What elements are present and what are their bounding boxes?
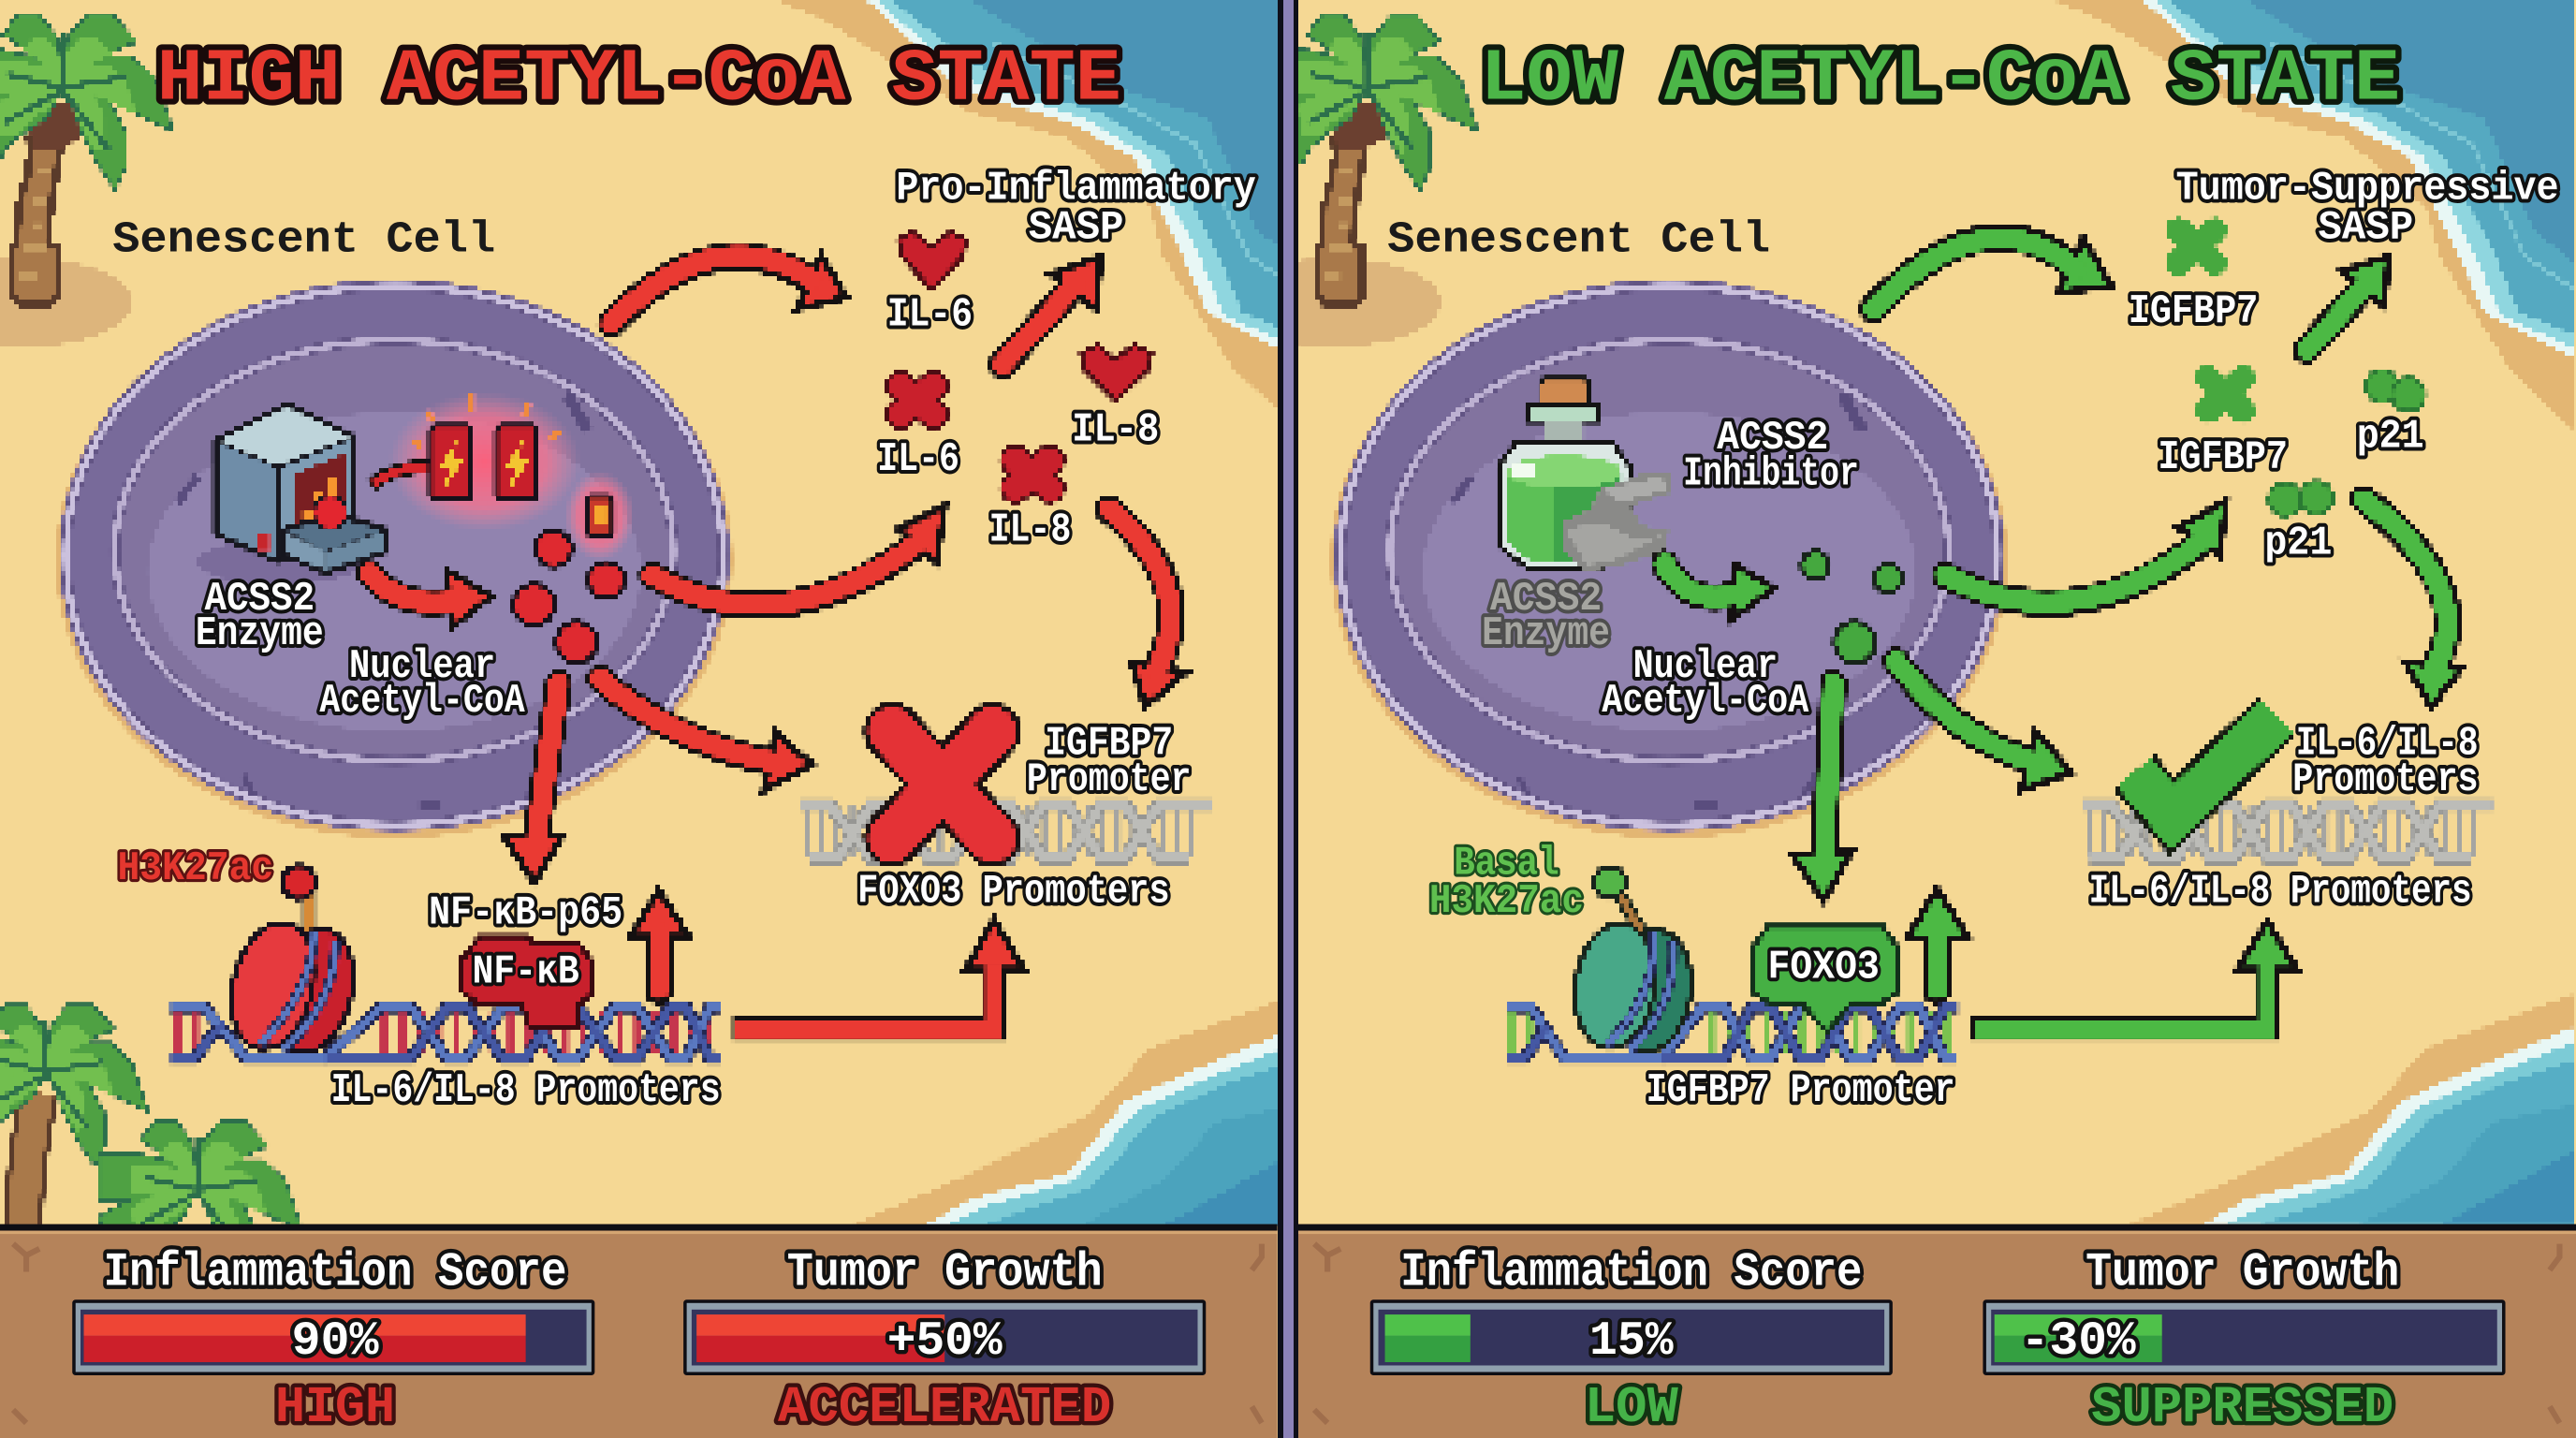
title: LOW ACETYL-CoA STATE [1480, 37, 2400, 121]
label: SASP: SASP [2318, 204, 2413, 251]
arrow: acetyl-CoA to IL-8 [652, 506, 944, 606]
icon: palm trees bottom left [0, 1006, 300, 1284]
senescent cell [1331, 279, 2008, 838]
label: enzyme: Enzyme [196, 610, 324, 657]
label: nuclear: Nuclear [349, 643, 495, 690]
heading: tumor growth: Tumor Growth [2086, 1246, 2399, 1299]
icon: palm tree top left [0, 17, 171, 305]
title: HIGH ACETYL-CoA STATE [157, 37, 1121, 121]
arrow: acetyl-CoA to check mark [1895, 661, 2071, 790]
status panel: high state [0, 1225, 1278, 1438]
icon: glowing batteries [372, 392, 634, 560]
label: nuclear: Nuclear [1633, 643, 1778, 690]
gene: gray promoter DNA [2082, 805, 2492, 858]
status: LOW: LOW [1585, 1380, 1678, 1437]
labels: low state [1387, 37, 2559, 1437]
label: SASP: SASP [1029, 204, 1123, 251]
label: H3K27ac: H3K27ac [1429, 878, 1584, 925]
arrow: IL-8 to IGFBP7 promoter [1109, 509, 1186, 707]
arrow: inhibitor to acetyl-CoA [1664, 564, 1775, 620]
value: +50%: +50% [887, 1315, 1003, 1369]
heading: inflammation score: Inflammation Score [104, 1246, 567, 1299]
icon: nuclear acetyl-CoA dots [1801, 551, 1902, 663]
label: IL-8 right: IL-8 [1072, 406, 1159, 453]
icon: ACSS2 enzyme machine [198, 404, 386, 585]
label: ACSS2 faded: ACSS2 [1490, 576, 1602, 623]
label: inhibitor: Inhibitor [1683, 451, 1859, 498]
label: basal: Basal [1454, 841, 1559, 888]
status panel: low state [1298, 1225, 2576, 1438]
icon: nuclear acetyl-CoA dots [513, 531, 624, 663]
label: FOXO3 promoters: FOXO3 Promoters [857, 869, 1170, 916]
label: IGFBP7 upper: IGFBP7 [2129, 288, 2258, 335]
label: promoters: Promoters [2292, 756, 2479, 803]
label: pro-inflammatory: Pro-Inflammatory [896, 165, 1256, 212]
gene: gray promoter DNA [800, 805, 1211, 858]
icon: gray anvil enzyme [1562, 472, 1673, 570]
bar: inflammation score 15% [1370, 1299, 1893, 1375]
label: ACSS2: ACSS2 [205, 576, 315, 623]
label: NF-kB: NF-κB [473, 949, 579, 996]
label: enzyme faded: Enzyme [1482, 610, 1610, 657]
label: acetyl-CoA: Acetyl-CoA [319, 678, 525, 725]
icon: NF-kB protein [460, 936, 592, 1027]
gene: IL-6/IL-8 promoter DNA [171, 1007, 720, 1058]
protein: p21 right [2365, 370, 2425, 411]
label: FOXO3: FOXO3 [1767, 944, 1880, 990]
panel: low acetyl-CoA state [1227, 0, 2576, 1438]
beach sand and ocean [1227, 0, 2574, 1225]
status: SUPPRESSED: SUPPRESSED [2091, 1380, 2393, 1437]
heading: tumor growth: Tumor Growth [787, 1246, 1103, 1299]
icon: palm tree top left [1265, 17, 1475, 305]
labels: high state [104, 37, 1256, 1437]
panel: high acetyl-CoA state [0, 0, 1298, 1438]
status: HIGH: HIGH [275, 1380, 395, 1437]
label: NF-kB-p65: NF-κB-p65 [429, 889, 622, 936]
label: p21 right: p21 [2357, 413, 2424, 460]
senescent cell [56, 279, 733, 838]
status: ACCELERATED: ACCELERATED [778, 1380, 1111, 1437]
divider between panels [1278, 0, 1298, 1438]
label: IL-6/IL-8: IL-6/IL-8 [2296, 721, 2479, 768]
cytokine: IL-6 heart [899, 231, 966, 289]
label: IGFBP7: IGFBP7 [1045, 721, 1173, 768]
label: H3K27ac: H3K27ac [117, 845, 273, 892]
icon: teal nucleosome with basal mark [1567, 867, 1699, 1056]
label: senescent cell: Senescent Cell [112, 216, 495, 266]
cytokine: IL-8 cross [1016, 460, 1050, 488]
icon: check mark [2134, 716, 2277, 816]
label: IL-8 lower: IL-8 [989, 506, 1071, 553]
value: 90%: 90% [292, 1315, 379, 1369]
cytokine: IL-8 heart [1081, 345, 1151, 401]
gene: IGFBP7 promoter DNA [1506, 1007, 1958, 1058]
value: 15%: 15% [1589, 1315, 1674, 1369]
label: IGFBP7 lower: IGFBP7 [2158, 434, 2288, 481]
bar: tumor growth +50% [683, 1299, 1206, 1375]
icon: ACSS2 inhibitor bottle [1499, 376, 1630, 568]
arrow: acetyl-CoA to blocked promoter [600, 679, 812, 790]
label: ACSS2: ACSS2 [1717, 415, 1828, 462]
value: -30%: -30% [2021, 1315, 2136, 1369]
heading: inflammation score: Inflammation Score [1400, 1246, 1862, 1299]
label: promoter: Promoter [1027, 756, 1191, 803]
icon: blocked X mark [892, 731, 992, 838]
arrow: cell to IL-6 [611, 256, 846, 324]
label: IL-6/IL-8 promoters: IL-6/IL-8 Promoters [331, 1067, 721, 1114]
arrow: cell to IGFBP7 [1873, 238, 2111, 309]
arrow: acetyl-CoA to p21 [1945, 501, 2226, 603]
protein: p21 lower [2269, 481, 2333, 516]
arrow: up from FOXO3 [1908, 889, 1969, 990]
arrow: cytokines to pro-inflammatory SASP [1003, 257, 1101, 365]
label: p21 lower: p21 [2264, 520, 2332, 566]
arrow: elbow promoters to FOXO3 [733, 920, 1023, 1029]
arrow: acetyl-CoA to FOXO3 [1793, 683, 1852, 901]
label: IL-6 upper: IL-6 [887, 292, 973, 339]
arrow: acetyl-CoA to NF-kB [505, 683, 562, 882]
arrow: up from NF-kB [631, 890, 688, 990]
protein: IGFBP7 upper [2178, 230, 2215, 263]
bar: inflammation score 90% [72, 1299, 594, 1375]
label: IGFBP7 promoter: IGFBP7 Promoter [1647, 1067, 1955, 1114]
label: acetyl-CoA: Acetyl-CoA [1602, 678, 1809, 725]
bar: tumor growth -30% [1983, 1299, 2506, 1375]
arrow: p21 to promoters [2364, 500, 2461, 707]
protein: IGFBP7 lower [2208, 378, 2243, 411]
cytokine: IL-6 cross [900, 386, 933, 414]
label: IL-6/IL-8 promoters: IL-6/IL-8 Promoters [2089, 869, 2472, 916]
arrow: elbow promoter to promoters [1971, 922, 2297, 1029]
icon: red nucleosome with H3K27ac mark [219, 866, 365, 1061]
label: IL-6 lower: IL-6 [877, 436, 959, 483]
arrow: enzyme to acetyl-CoA [370, 570, 491, 627]
label: senescent cell: Senescent Cell [1387, 216, 1770, 266]
arrow: factors to tumor-suppressive SASP [2306, 257, 2389, 350]
icon: FOXO3 protein [1751, 927, 1899, 1032]
beach sand and ocean [0, 0, 1298, 1225]
